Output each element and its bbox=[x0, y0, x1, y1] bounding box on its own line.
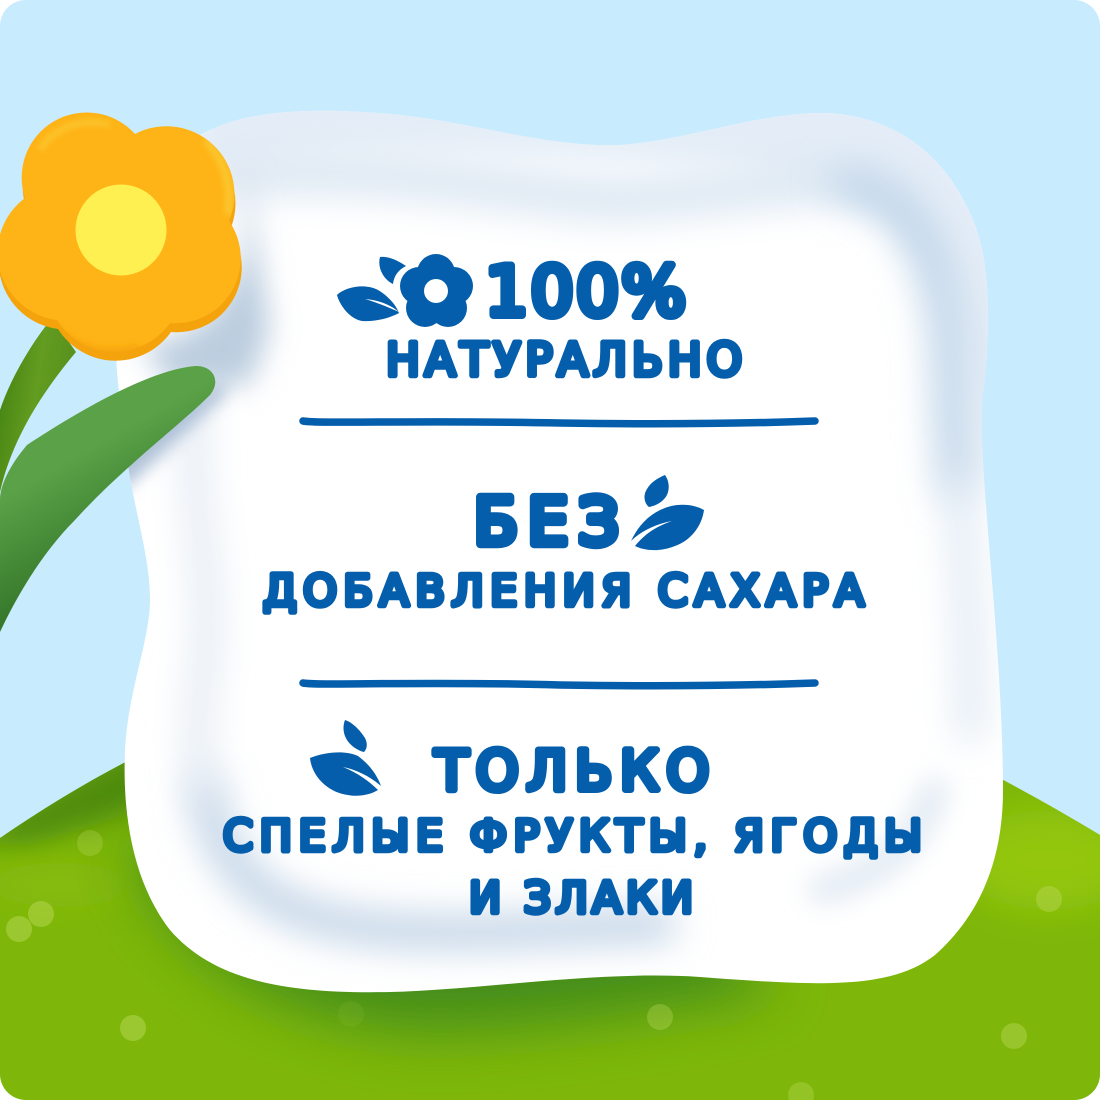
heading: without: БЕЗ bbox=[474, 486, 619, 560]
icon: leaves bbox=[631, 475, 704, 550]
section 1: 100% natural bbox=[337, 253, 742, 386]
flower stem bbox=[0, 318, 76, 492]
subheading: ripe fruits, berries: СПЕЛЫЕ ФРУКТЫ, ЯГОДЫ bbox=[223, 812, 922, 862]
icon: leaves bbox=[310, 720, 381, 796]
heading: 100%: 100% bbox=[485, 253, 686, 332]
divider 2 bbox=[303, 683, 815, 686]
subheading: and cereals: И ЗЛАКИ bbox=[469, 874, 693, 924]
subheading: sugar: ДОБАВЛЕНИЯ САХАРА bbox=[263, 566, 865, 616]
green leaf bbox=[0, 366, 215, 632]
subheading: natural: НАТУРАЛЬНО bbox=[386, 334, 742, 386]
icon: flower and leaves bbox=[337, 254, 473, 327]
white cloud panel bbox=[116, 110, 1003, 992]
section 2: no added sugar bbox=[263, 475, 865, 616]
shadow of flower on panel bbox=[140, 160, 270, 385]
section 3: only ripe fruit bbox=[223, 720, 922, 924]
flower bbox=[0, 112, 242, 365]
divider 1 bbox=[303, 421, 815, 424]
heading: only: ТОЛЬКО bbox=[434, 740, 709, 802]
shadow of leaf on panel bbox=[128, 380, 231, 493]
bokeh dots bbox=[6, 830, 1062, 1100]
green hill bbox=[0, 762, 1100, 1100]
